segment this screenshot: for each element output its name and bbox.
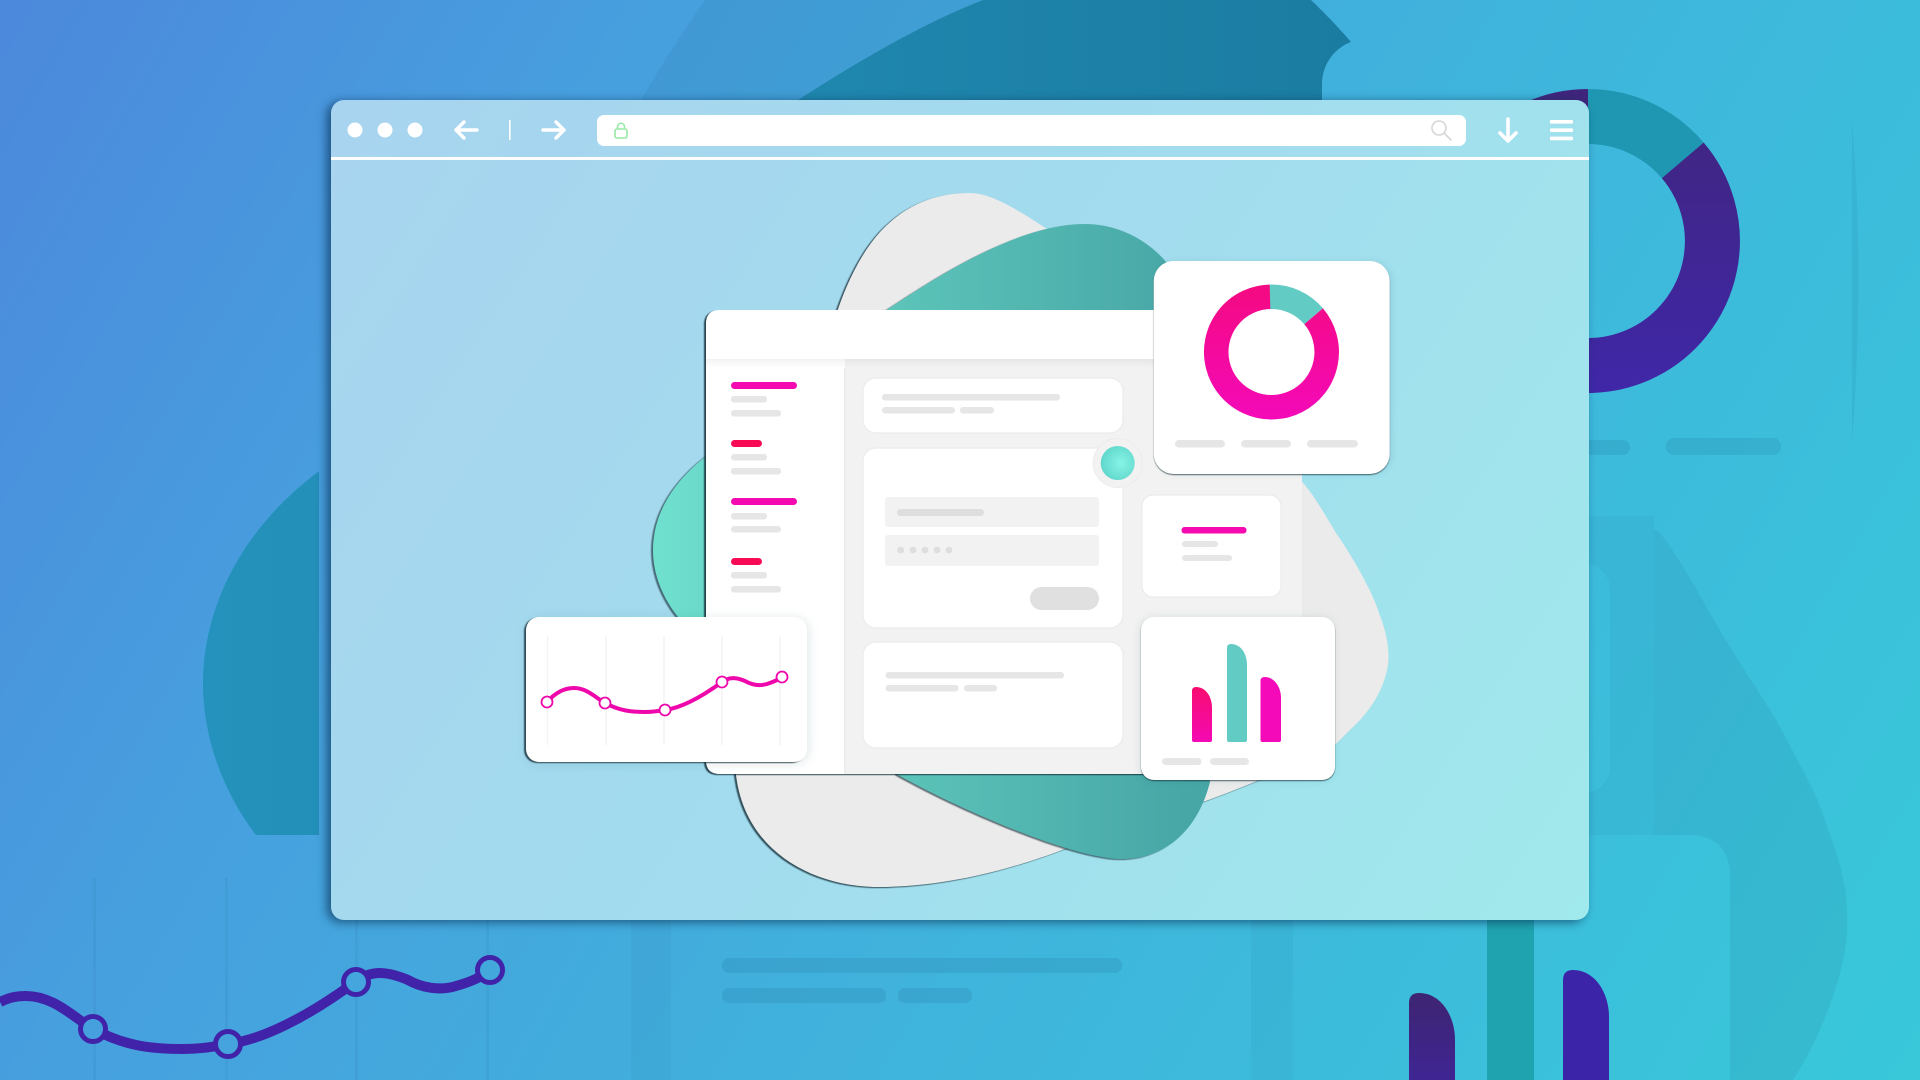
toolbar separator line xyxy=(331,157,1589,160)
sidebar divider xyxy=(844,368,846,774)
toolbar divider xyxy=(509,120,511,140)
background small card xyxy=(1296,563,1610,793)
icon: back arrow xyxy=(456,122,477,138)
background blob: grey shape top xyxy=(615,0,1352,148)
chart grid lines xyxy=(548,636,780,745)
button xyxy=(1030,587,1099,610)
background blob: teal shape left xyxy=(203,472,331,835)
background blob: teal shape top xyxy=(727,0,1352,148)
address bar xyxy=(597,115,1466,146)
panel body xyxy=(706,310,1302,774)
bar 2 xyxy=(1227,644,1247,742)
chart curve xyxy=(547,677,782,712)
status dot xyxy=(1093,438,1142,488)
card: donut chart xyxy=(1154,261,1390,474)
background line chart curve xyxy=(0,958,502,1056)
sidebar menu items xyxy=(731,382,797,592)
card: bottom text xyxy=(863,642,1123,748)
icon: forward arrow xyxy=(543,122,564,138)
background donut chart xyxy=(1463,116,1712,365)
icon: download arrow xyxy=(1500,119,1516,141)
window body xyxy=(331,100,1589,920)
background dashboard panel xyxy=(319,148,1654,1080)
donut legend bars xyxy=(1175,440,1358,448)
card: top text xyxy=(863,378,1123,433)
background line chart card xyxy=(0,835,546,1080)
card: login form xyxy=(863,448,1123,628)
input field: password xyxy=(885,535,1099,566)
toolbar: window dots xyxy=(348,122,422,138)
bar 1 xyxy=(1192,687,1212,742)
background blob: grey shape right xyxy=(1580,480,1847,1080)
card: line chart xyxy=(526,617,807,762)
panel: dashboard xyxy=(706,310,1302,774)
blob: grey shape xyxy=(720,193,1389,887)
background content card with text lines xyxy=(671,892,1251,1080)
card: small text xyxy=(1142,495,1281,597)
card: bar chart xyxy=(1141,617,1335,780)
bar 3 xyxy=(1260,677,1281,742)
browser window xyxy=(331,100,1589,920)
bar labels xyxy=(1162,758,1249,765)
icon: lock xyxy=(615,123,627,138)
icon: menu xyxy=(1550,120,1573,140)
blob: teal shape xyxy=(653,224,1230,859)
background bar chart card xyxy=(1293,835,1730,1080)
donut ring xyxy=(1216,297,1327,407)
input field: text xyxy=(885,497,1099,527)
header shadow xyxy=(706,359,1302,368)
icon: search xyxy=(1432,121,1451,140)
chart data points xyxy=(542,672,788,716)
background donut card xyxy=(1322,39,1858,516)
